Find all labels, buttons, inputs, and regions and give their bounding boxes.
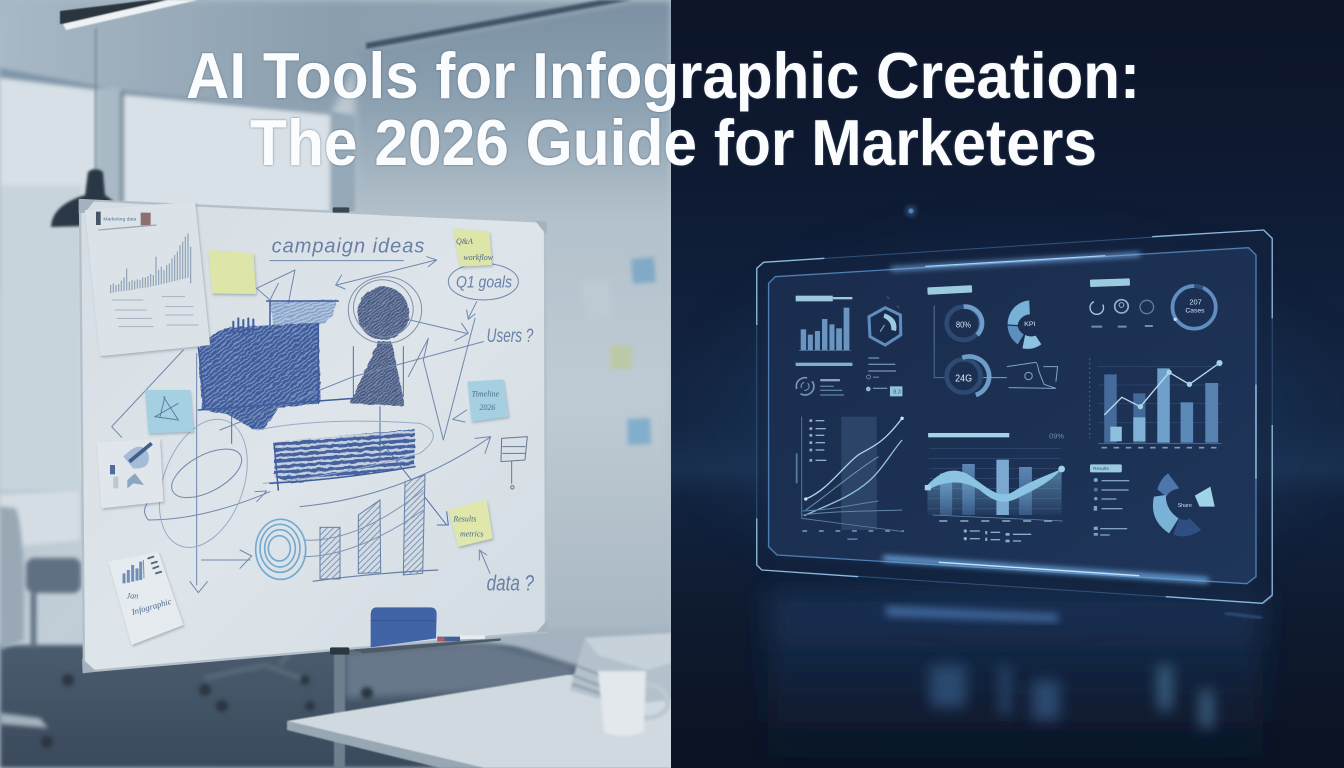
ceiling beam: [366, 0, 632, 49]
inner screen: [769, 248, 1256, 584]
sticky note: blue right: 2026: [479, 403, 495, 412]
left half: blurred office background: [0, 0, 672, 768]
panel: lower right donut legend: Results: [1093, 466, 1109, 471]
blue eraser: [371, 607, 437, 647]
panel: lower centre area chart: [925, 432, 1065, 542]
horizontal hatched block: [274, 429, 415, 483]
bright frame segments: [757, 230, 1272, 603]
panel: centre donuts: [927, 285, 1058, 395]
sticky note: yellow bottom: metrics: [460, 530, 484, 539]
floor reflection: [760, 584, 1268, 768]
panel: top right gauges: 207: [1189, 297, 1202, 306]
sticky note: yellow top right: workflow: [463, 253, 494, 262]
sticky note: blue right: Timeline: [472, 390, 500, 399]
mini stats block: 8.3: [893, 389, 901, 395]
top stand clip: [333, 207, 349, 213]
ceiling light: [60, 0, 198, 30]
mug: [598, 671, 668, 736]
outer frame: [757, 230, 1272, 603]
title: AI Tools for Infographic Creation:: [186, 39, 1140, 112]
pinned data note: [108, 552, 183, 645]
donut: segmented: KPI: [1024, 322, 1036, 328]
sketch scribbles: [198, 287, 415, 483]
sketch lines and arrows: [112, 257, 527, 593]
panel: lower left line chart: [797, 417, 904, 540]
sticky note: yellow bottom: Results: [452, 515, 476, 524]
report page pinned top left: Marketing data: [103, 217, 137, 223]
board frame and surface: [80, 200, 546, 672]
side table and chair: [0, 490, 81, 748]
mini stats block: [796, 357, 902, 396]
sticky note: yellow top right: [453, 228, 494, 267]
sticky note: yellow bottom: [448, 500, 493, 547]
bar sketch: [303, 475, 438, 581]
title: [186, 39, 1140, 179]
scribble ball: [357, 287, 409, 340]
window panes and frames: [0, 68, 355, 490]
desk: [287, 670, 672, 768]
panel: top left bar chart: [796, 296, 852, 351]
blue spiral: [256, 519, 306, 579]
hexagon gauge: [869, 297, 907, 345]
outer glow: [769, 248, 1255, 583]
sticky note: blue left: [145, 390, 193, 433]
stand clamp: [330, 647, 349, 655]
panel: top right gauges: [1090, 278, 1216, 329]
pinned data note: Infographic: [129, 596, 173, 617]
right half: dark studio background: [671, 0, 1344, 768]
books: [570, 633, 672, 705]
holographic dashboard: [757, 230, 1272, 603]
report page pinned top left: [85, 202, 210, 356]
donut segments: [1157, 473, 1179, 497]
sticky note: yellow top right: Q&A: [456, 237, 473, 246]
sticky note: yellow upper: [208, 250, 256, 294]
panel: lower right donut legend: [1090, 464, 1215, 536]
handwriting: campaign ideas: campaign ideas: [272, 235, 424, 257]
panel: right combo chart: [1090, 358, 1223, 448]
small pinned chart page: [97, 438, 163, 508]
title: The 2026 Guide for Marketers: [250, 106, 1097, 179]
whiteboard: [79, 199, 547, 673]
pendant lamp: [51, 28, 122, 227]
donut: bottom 24G: 24G: [955, 374, 972, 385]
main hatched block: [198, 323, 321, 430]
glow edges: [885, 254, 1256, 580]
handwriting: Q1 goals: Q1 goals: [456, 272, 512, 291]
stand pole: [334, 650, 345, 768]
pinned data note: Jan: [127, 591, 138, 600]
wall right of window: [355, 0, 672, 660]
donut: top: 80%: [956, 321, 971, 330]
board corner caps: [79, 199, 547, 673]
pale upper block: [270, 299, 337, 327]
sticky note: blue right: [467, 379, 509, 422]
blue haze: [715, 250, 1315, 590]
device sketch: [983, 362, 1058, 388]
floor: [0, 645, 672, 768]
cone: [350, 342, 405, 407]
office chair legs: [199, 640, 373, 712]
marker tray: [353, 635, 501, 653]
handwriting: data?: data ?: [487, 571, 535, 596]
handwriting: Users?: Users ?: [487, 326, 534, 347]
wall notes: [582, 257, 656, 445]
panel: top right gauges: Cases: [1185, 307, 1205, 314]
panel: lower right donut legend: Share: [1178, 503, 1192, 509]
ceiling: [0, 0, 672, 115]
panel: lower centre area chart: 09%: [1049, 432, 1064, 441]
floating light speck: [908, 208, 914, 214]
